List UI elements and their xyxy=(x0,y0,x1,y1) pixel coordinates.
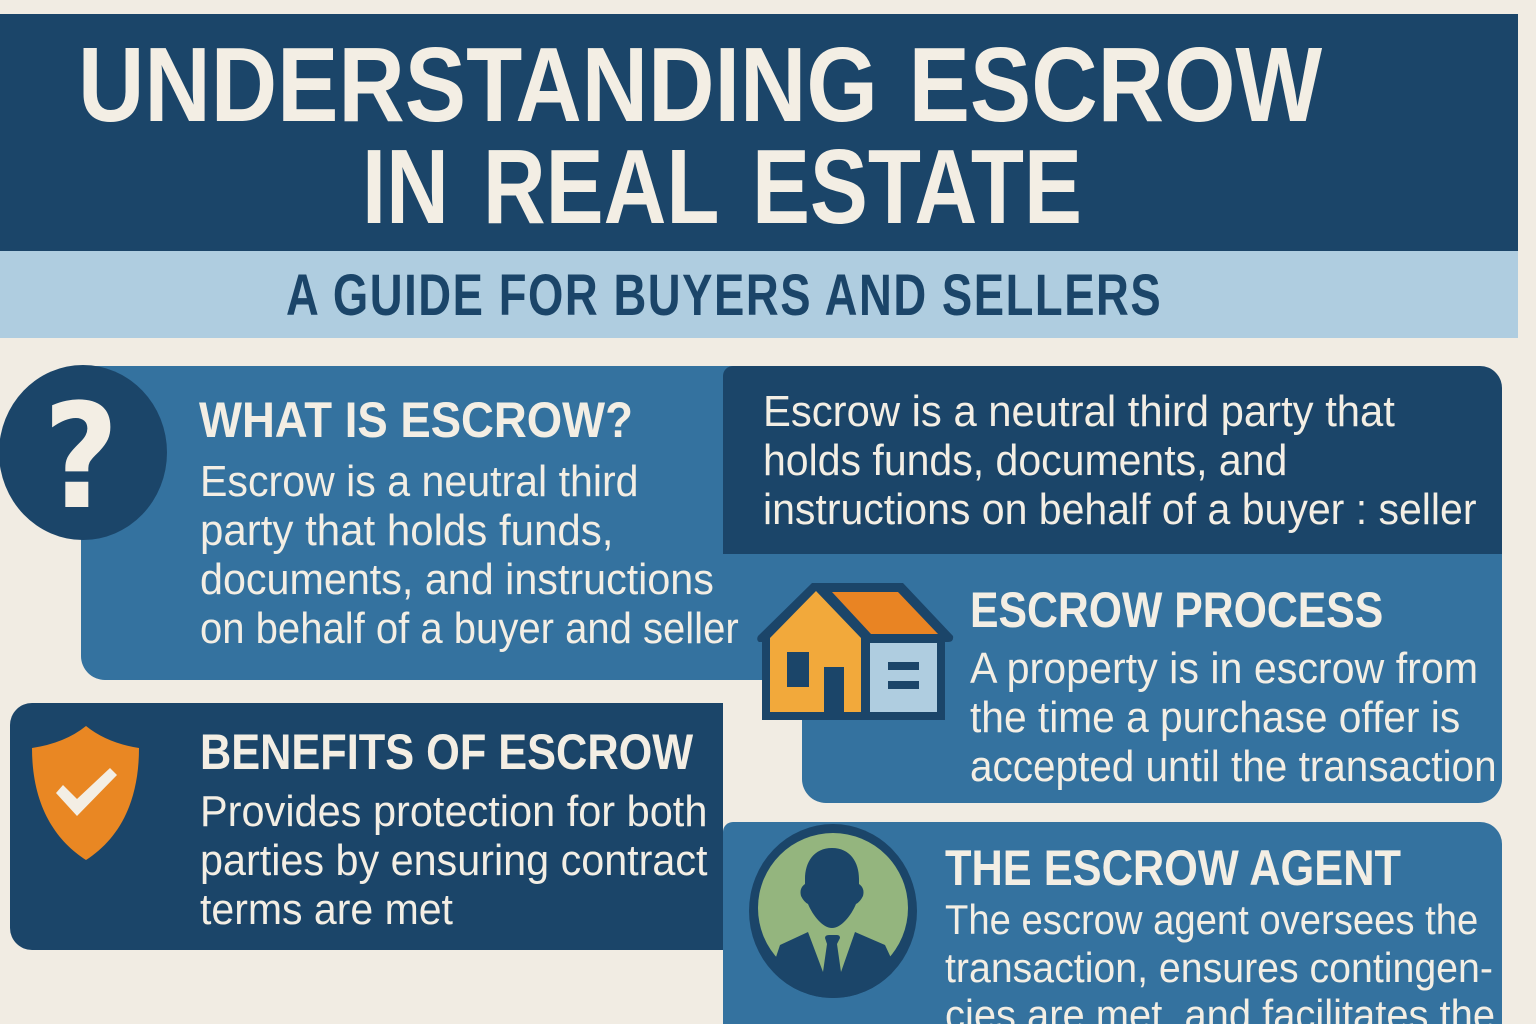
title line 2: IN REAL ESTATE xyxy=(362,128,1082,246)
panel: escrow process xyxy=(802,554,1502,803)
subtitle band xyxy=(0,251,1518,338)
body text: terms are met xyxy=(200,885,453,934)
panel: definition xyxy=(723,366,1502,554)
body text: party that holds funds, xyxy=(200,506,613,555)
heading: THE ESCROW AGENT xyxy=(945,840,1401,896)
heading: WHAT IS ESCROW? xyxy=(199,392,633,448)
icon: agent xyxy=(749,824,917,998)
body text: The escrow agent oversees the xyxy=(945,896,1478,943)
body text: documents, and instructions xyxy=(200,555,714,604)
body text: on behalf of a buyer and seller xyxy=(200,604,739,653)
body text xyxy=(970,644,1497,791)
definition text xyxy=(763,387,1476,534)
subtitle: A GUIDE FOR BUYERS AND SELLERS xyxy=(286,263,1162,328)
heading: ESCROW PROCESS xyxy=(970,582,1383,638)
definition text: Escrow is a neutral third party that xyxy=(763,387,1395,436)
body text: Provides protection for both xyxy=(200,787,707,836)
definition text: instructions on behalf of a buyer : seller xyxy=(763,485,1476,534)
heading: BENEFITS OF ESCROW xyxy=(200,724,693,780)
body text: A property is in escrow from xyxy=(970,644,1478,693)
panel: the escrow agent xyxy=(723,822,1502,1024)
body text: accepted until the transaction xyxy=(970,742,1497,791)
panel: benefits of escrow xyxy=(10,703,723,950)
body text: parties by ensuring contract xyxy=(200,836,708,885)
body text xyxy=(200,457,739,653)
icon: question mark xyxy=(0,365,167,540)
icon: shield xyxy=(32,726,139,860)
body text: Escrow is a neutral third xyxy=(200,457,639,506)
body text: the time a purchase offer is xyxy=(970,693,1460,742)
question glyph: ? xyxy=(43,373,119,540)
icon: house xyxy=(757,583,954,720)
panel background xyxy=(81,366,802,680)
title line 1: UNDERSTANDING ESCROW xyxy=(78,26,1322,144)
body text xyxy=(200,787,708,934)
body text: transaction, ensures contingen- xyxy=(945,944,1493,990)
definition text: holds funds, documents, and xyxy=(763,436,1287,485)
panel: what is escrow xyxy=(0,365,802,680)
body text xyxy=(945,896,1495,1024)
title banner xyxy=(0,14,1518,251)
